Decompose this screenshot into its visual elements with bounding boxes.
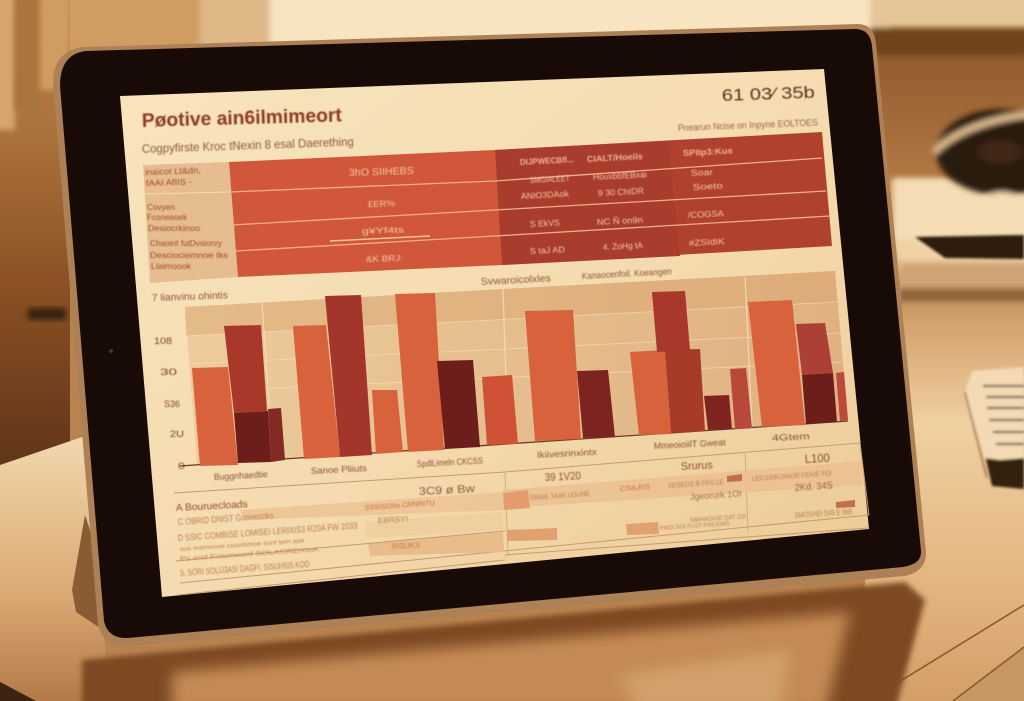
bottom section heading: L100 xyxy=(804,451,830,466)
table values: 3hO SIIHEBS xyxy=(349,166,414,179)
table row labels: Fconeaoek xyxy=(147,212,188,222)
table values: Soeto xyxy=(693,180,723,192)
table values: 9 30 ChIDR xyxy=(598,186,644,198)
bottom table rows: EBRSYI xyxy=(378,514,408,525)
chart captions: Svwaroicolxles xyxy=(481,273,551,288)
bottom section heading: 39 1V20 xyxy=(545,470,581,484)
table values: g¥Yf4ts xyxy=(362,225,404,236)
table row labels: Covyen xyxy=(147,202,175,212)
heading: Pøotive ain6ilmimeort xyxy=(142,105,343,132)
table values: HouxbbfEBxai xyxy=(593,169,647,182)
table values: DIJPWECBfl... xyxy=(520,154,574,167)
bottom table rows xyxy=(177,470,853,578)
bottom table rows: sos mamnose coaxitimoe sunl tem aoe xyxy=(180,538,306,553)
panel: bottom data table xyxy=(174,443,869,595)
chart baseline xyxy=(180,421,848,466)
background: right wall and shelf shadow xyxy=(870,28,1024,180)
bottom table rows: CSILRS xyxy=(620,484,650,493)
bottom table rows: D SSIC COMBISE LOMISEI LERIXIS3 R20A FW 2033 xyxy=(177,520,358,543)
table values: /COGSA xyxy=(688,208,724,220)
table values: NC Ñ on9n xyxy=(597,215,643,227)
bottom table rows: LEEGSIKOIAOR FEAIE FDI xyxy=(752,470,832,483)
table dark red section xyxy=(495,132,832,265)
subheading: Cogpyfirste Kroc tNexin 8 esal Daerething xyxy=(142,135,354,156)
bottom table rows: S. SORI SOLIJ3ASI DAGFI. SISUH5IS KOD xyxy=(179,559,310,578)
table values: S EkVS xyxy=(530,217,560,229)
bottom section heading: Srurus xyxy=(681,459,714,473)
bars xyxy=(192,367,238,466)
bottom table rows: Jgeorurk 1OI xyxy=(689,488,742,502)
screen xyxy=(120,69,869,597)
top right caption: Pnearun Ncise on Inpyne EOLTOES xyxy=(678,117,818,133)
table values xyxy=(349,145,733,264)
table row labels background xyxy=(143,162,238,283)
table values: 4. ZoHg tA xyxy=(603,240,643,252)
tablet reflection on desk xyxy=(82,582,925,701)
table row labels: Llaimoook xyxy=(151,261,192,271)
bottom section heading xyxy=(176,451,830,514)
y axis labels: 2U xyxy=(170,429,184,439)
bottom section heading: A Bouruecloads xyxy=(176,499,248,514)
chart x-axis labels: Ikiivesrinxintx xyxy=(537,447,598,460)
y axis labels: 30 xyxy=(160,367,177,377)
table row labels: Chaoint futDvsionry xyxy=(150,238,223,248)
bottom table rows: C OBRID DNIST Gonnecoks xyxy=(177,510,274,527)
table row labels: Desciociemnoe tks xyxy=(150,250,228,260)
y axis labels: S36 xyxy=(164,399,180,409)
bottom table rows: Ps snd Foiomeonf SOLAORDXIoK xyxy=(180,546,321,563)
background: curtain xyxy=(0,0,70,480)
table values: ANIO3DAok xyxy=(521,188,570,201)
table row labels: Desiocrkinoo xyxy=(148,223,200,233)
object: desk phone xyxy=(934,109,1024,206)
bar chart xyxy=(154,271,848,471)
table light red section xyxy=(229,150,502,277)
object: dark plate xyxy=(915,235,1024,259)
y axis labels xyxy=(154,336,185,471)
chart x-axis labels xyxy=(214,431,810,482)
bottom table rows: SMOSHEI S45 E IME xyxy=(795,507,853,520)
table row labels xyxy=(145,165,228,271)
table values: SMGIALEET xyxy=(530,173,570,185)
y axis labels: 108 xyxy=(154,336,172,346)
bottom table rows: 2Kd. 34S xyxy=(794,480,833,494)
table row labels: inaicot Lt&dn, xyxy=(145,165,201,177)
object: table top with stacked books xyxy=(893,178,1024,314)
top right figure: 61 03⁄ 35b xyxy=(721,83,815,105)
bottom section heading: 3C9 ø Bw xyxy=(419,483,475,498)
bottom table rows: RISUKS xyxy=(392,541,420,551)
y axis labels: 0 xyxy=(178,461,185,471)
bottom table rows: SSSISOIIn CRNINTU xyxy=(365,500,435,512)
highlighted rows xyxy=(240,492,504,520)
chart captions xyxy=(152,266,672,304)
object: keyboard xyxy=(965,367,1024,489)
chart captions: Kanaocenfoil. Koeangen xyxy=(582,266,672,281)
table values: &K BRJ: xyxy=(366,253,403,264)
bottom table rows: SIMHAOIOD DAT 1Oi xyxy=(690,514,746,524)
table row labels: fAAI AfIIS - xyxy=(146,176,192,188)
bottom table rows: XESEOS B FRS LE xyxy=(668,479,724,490)
chart captions: 7 lianvinu ohintis xyxy=(152,290,228,304)
table values: SPIIp3:Kus xyxy=(683,145,733,158)
table values: £ER% xyxy=(368,198,396,209)
chart plot background xyxy=(185,271,848,465)
chart x-axis labels: Sanoe Pliiuts xyxy=(311,463,368,476)
tablet body xyxy=(53,24,926,646)
chart x-axis labels: MmeoioiilT Gweat xyxy=(654,437,727,451)
table values: S taJ AD xyxy=(530,244,565,256)
table values: Soar xyxy=(691,167,713,178)
background: wooden desk xyxy=(0,305,1024,701)
background: room wall and window xyxy=(0,0,1024,290)
camera dot xyxy=(109,349,113,353)
chart x-axis labels: 4Gtem xyxy=(772,431,810,443)
tablet stand xyxy=(72,515,100,628)
table values: CIALT/Hoeils xyxy=(587,151,643,164)
chart x-axis labels: Buggnhaedtie xyxy=(214,469,268,482)
panel: table xyxy=(143,132,832,283)
table values: #ZSIdIK xyxy=(689,236,725,248)
bottom table rows: PNOI SOI FLOT FNILIOAS xyxy=(660,521,730,532)
bottom table rows: SMAIE TAAK UGUNE xyxy=(530,491,590,502)
chart x-axis labels: SpdlLimeln CKCSS xyxy=(417,456,483,469)
